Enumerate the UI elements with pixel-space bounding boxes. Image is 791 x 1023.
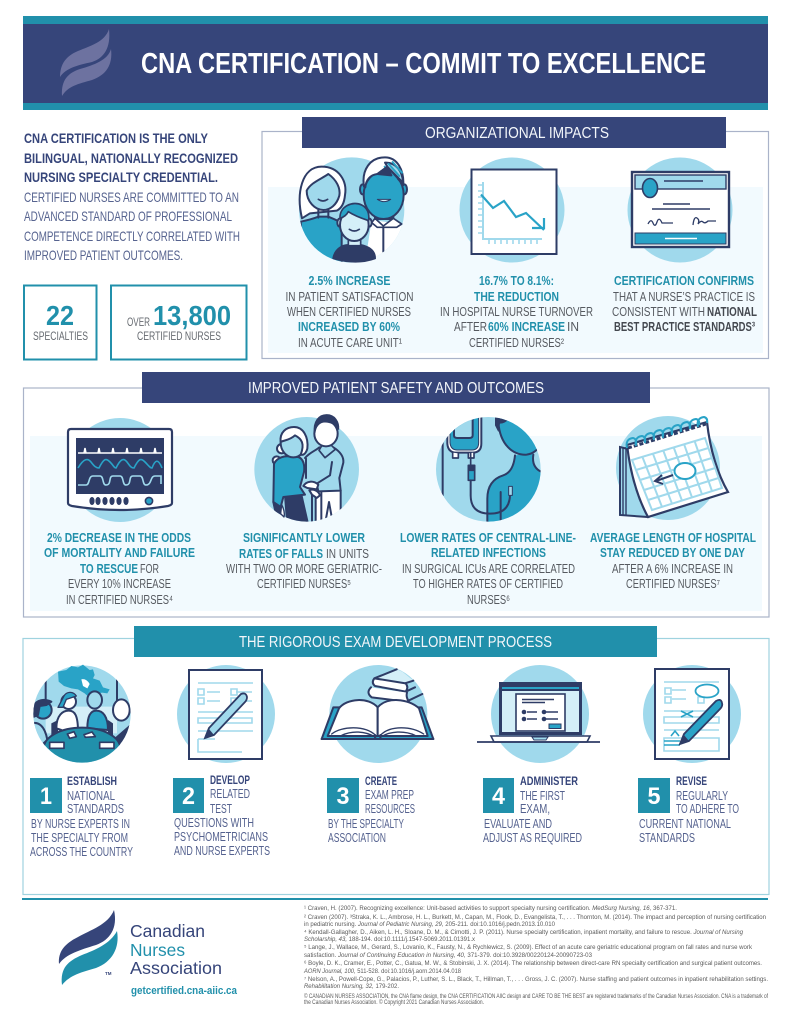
intro text block: CERTIFIED NURSES ARE COMMITTED TO AN bbox=[24, 189, 239, 205]
references: AORN Journal, 100, 511-528. doi:10.1016/j.aorn.2014.04.018 bbox=[303, 969, 462, 975]
panel: the rigorous exam development process bbox=[23, 626, 769, 894]
heading: organizational impacts bbox=[302, 117, 726, 148]
icon: laptop with exam bbox=[477, 665, 600, 763]
text: nurse turnover bbox=[440, 274, 593, 350]
step 4: ADJUST AS REQUIRED bbox=[483, 831, 582, 845]
step 4: EXAM, bbox=[520, 802, 550, 816]
step 3: RESOURCES bbox=[365, 802, 415, 816]
references: ⁴ Kendall-Gallagher, D., Aiken, L. H., Sloane, D. M., & Cimotti, J. P. (2011). Nurse specialty certification, inpatient mortality, and failure to rescue. Journal of Nursing bbox=[304, 929, 744, 936]
text: certification confirms: THAT A NURSE’S PRACTICE IS bbox=[613, 290, 755, 304]
step 2 bbox=[173, 775, 270, 858]
text: nurse turnover: 16.7% TO 8.1%: bbox=[479, 274, 554, 288]
text: nurse turnover: IN bbox=[567, 320, 579, 334]
text: length of stay: AFTER A 6% INCREASE IN bbox=[612, 562, 733, 576]
intro text block: COMPETENCE DIRECTLY CORRELATED WITH bbox=[24, 228, 240, 244]
references: ⁶ Boyle, D. K., Cramer, E., Potter, C., Gatua, M. W., & Stobinski, J. X. (2014). The relationship between direct-care RN specialty certification and surgical patient outcomes. bbox=[304, 960, 762, 967]
icon: vital signs monitor bbox=[68, 418, 172, 522]
step 5: REVISE bbox=[676, 776, 707, 788]
icon: open book and stack of books bbox=[322, 665, 433, 763]
text: falls: SIGNIFICANTLY LOWER bbox=[243, 531, 365, 545]
step 2: 2 bbox=[182, 783, 195, 810]
text: infections: IN SURGICAL ICUs ARE CORRELATED bbox=[402, 562, 575, 576]
step 2: DEVELOP bbox=[210, 775, 250, 787]
text: infections bbox=[400, 531, 576, 607]
text: patient satisfaction: INCREASED BY 60% bbox=[298, 320, 400, 334]
heading: exam process: THE RIGOROUS EXAM DEVELOPMENT PROCESS bbox=[239, 634, 552, 651]
step 1: STANDARDS bbox=[67, 802, 124, 816]
logo: Canadian Nurses Association: Nurses bbox=[130, 940, 185, 960]
text: certification confirms: CONSISTENT WITH bbox=[612, 305, 705, 319]
step 2: QUESTIONS WITH bbox=[174, 816, 254, 830]
text: falls: RATES OF FALLS bbox=[239, 547, 323, 561]
icon: team around a table with map bbox=[31, 665, 131, 769]
text: certification confirms: NATIONAL bbox=[707, 305, 757, 319]
step 1: BY NURSE EXPERTS IN bbox=[31, 817, 130, 831]
panel: organizational impacts bbox=[262, 117, 768, 358]
logo: Canadian Nurses Association bbox=[59, 910, 238, 997]
step 1: ACROSS THE COUNTRY bbox=[30, 845, 133, 859]
step 2: AND NURSE EXPERTS bbox=[174, 844, 270, 858]
text: mortality bbox=[44, 531, 195, 607]
text: nurse turnover: 60% INCREASE bbox=[488, 320, 565, 334]
text: falls: WITH TWO OR MORE GERIATRIC- bbox=[226, 562, 382, 576]
text: infections: RELATED INFECTIONS bbox=[431, 546, 546, 560]
step 5 bbox=[638, 776, 739, 845]
text: patient satisfaction bbox=[286, 274, 414, 350]
step 5: STANDARDS bbox=[639, 831, 695, 845]
text: certification confirms: CERTIFICATION CONFIRMS bbox=[614, 274, 754, 288]
text: mortality: FOR bbox=[140, 562, 159, 576]
step 2: RELATED bbox=[210, 787, 250, 801]
references: ⁵ Lange, J., Wallace, M., Gerard, S., Lovanio, K., Fausty, N., & Rychlewicz, S. (2009). Effect of an acute care geriatric educational program on fall rates and nurse work bbox=[304, 944, 753, 951]
references: the Canadian Nurses Association. © Copyright 2021 Canadian Nurses Association. bbox=[304, 999, 484, 1006]
intro text block: IMPROVED PATIENT OUTCOMES. bbox=[24, 247, 183, 263]
references: ¹ Craven, H. (2007). Recognizing excellence: Unit-based activities to support specialty nursing certification. MedSurg Nursing, 16, 367-371. bbox=[304, 906, 677, 912]
step 5: REGULARLY bbox=[676, 789, 728, 803]
text: certification confirms bbox=[612, 274, 757, 334]
icon: family bbox=[299, 157, 407, 263]
references: in pediatric nursing. Journal of Pediatric Nursing, 29, 205-211. doi:10.1016/j.pedn.2013.10.010 bbox=[304, 922, 556, 928]
text: patient satisfaction: IN ACUTE CARE UNIT¹ bbox=[298, 336, 402, 350]
text: infections: NURSES⁶ bbox=[467, 593, 510, 607]
step 3: EXAM PREP bbox=[365, 788, 414, 802]
step 3 bbox=[327, 776, 415, 845]
text: length of stay: AVERAGE LENGTH OF HOSPITAL bbox=[590, 531, 756, 545]
heading: improved patient safety: IMPROVED PATIENT SAFETY AND OUTCOMES bbox=[248, 380, 544, 397]
heading: exam process bbox=[134, 626, 657, 657]
text: length of stay: STAY REDUCED BY ONE DAY bbox=[600, 546, 746, 560]
icon: certificate bbox=[628, 158, 732, 262]
step 2: TEST bbox=[210, 802, 232, 816]
panel: improved patient safety and outcomes bbox=[24, 372, 769, 617]
intro text block: CNA CERTIFICATION IS THE ONLY bbox=[24, 130, 209, 146]
step 1 bbox=[30, 776, 133, 859]
text: patient satisfaction: IN PATIENT SATISFACTION bbox=[286, 290, 414, 304]
icon: revised form and pen bbox=[643, 665, 741, 763]
text: nurse turnover: IN HOSPITAL NURSE TURNOVER bbox=[440, 305, 593, 319]
references: ⁷ Nelson, A., Powell-Cope, G., Palacios, P., Luther, S. L., Black, T., Hillman, T., . . . Gross, J. C. (2007). Nurse staffing and patient outcomes in inpatient rehabilitation settings. bbox=[304, 976, 768, 983]
header banner bbox=[23, 16, 768, 110]
logo: Canadian Nurses Association: TM bbox=[105, 971, 112, 976]
icon: exam form and pen bbox=[177, 665, 275, 763]
icon: calendar bbox=[616, 416, 728, 520]
step 3: ASSOCIATION bbox=[328, 831, 386, 845]
stat box: 22 specialties: 22 bbox=[46, 300, 74, 331]
icon: header flame bbox=[60, 29, 111, 96]
step 1: THE SPECIALTY FROM bbox=[31, 831, 128, 845]
logo: Canadian Nurses Association: Canadian bbox=[130, 921, 205, 941]
intro text block: NURSING SPECIALTY CREDENTIAL. bbox=[24, 169, 218, 185]
footer rule bbox=[22, 898, 768, 900]
logo: Canadian Nurses Association: getcertified.cna-aiic.ca bbox=[131, 985, 238, 997]
stat box: 13,800 certified nurses: 13,800 bbox=[153, 300, 231, 331]
step 4: 4 bbox=[492, 783, 506, 810]
step 3: 3 bbox=[336, 783, 350, 810]
logo: Canadian Nurses Association: Association bbox=[130, 958, 222, 978]
stat box: 22 specialties bbox=[24, 286, 96, 360]
intro text block: BILINGUAL, NATIONALLY RECOGNIZED bbox=[24, 150, 238, 166]
text: patient satisfaction: 2.5% INCREASE bbox=[308, 274, 390, 288]
references: Scholarship, 43, 188-194. doi:10.1111/j.1547-5069.2011.01391.x bbox=[304, 937, 475, 943]
heading: organizational impacts: ORGANIZATIONAL IMPACTS bbox=[425, 125, 609, 142]
text: mortality: OF MORTALITY AND FAILURE bbox=[44, 546, 195, 560]
intro text block: ADVANCED STANDARD OF PROFESSIONAL bbox=[24, 208, 232, 224]
references: Rehabilitation Nursing, 32, 179-202. bbox=[304, 984, 399, 990]
step 4: ADMINISTER bbox=[520, 776, 579, 788]
stat box: 13,800 certified nurses bbox=[111, 286, 246, 360]
step 5: TO ADHERE TO bbox=[676, 802, 739, 816]
text: mortality: TO RESCUE bbox=[80, 562, 138, 576]
text: nurse turnover: CERTIFIED NURSES² bbox=[469, 336, 564, 350]
step 2: PSYCHOMETRICIANS bbox=[174, 830, 268, 844]
text: mortality: IN CERTIFIED NURSES⁴ bbox=[66, 593, 173, 607]
heading: improved patient safety bbox=[142, 372, 650, 403]
stat box: 13,800 certified nurses: OVER bbox=[127, 315, 150, 329]
step 3: CREATE bbox=[365, 776, 397, 788]
text: mortality: EVERY 10% INCREASE bbox=[68, 577, 171, 591]
text: falls bbox=[226, 531, 382, 591]
step 1: ESTABLISH bbox=[67, 776, 117, 788]
step 3: BY THE SPECIALTY bbox=[328, 817, 404, 831]
text: infections: TO HIGHER RATES OF CERTIFIED bbox=[413, 577, 563, 591]
references: satisfaction. Journal of Continuing Education in Nursing, 40, 371-379. doi:10.3928/00220124-20090723-03 bbox=[304, 953, 593, 959]
step 5: CURRENT NATIONAL bbox=[639, 817, 731, 831]
text: falls: IN UNITS bbox=[326, 547, 369, 561]
text: length of stay bbox=[590, 531, 756, 591]
icon: declining chart bbox=[460, 158, 564, 262]
step 1: NATIONAL bbox=[67, 789, 115, 803]
icon: nurse helping elderly patient bbox=[254, 415, 359, 525]
step 5: 5 bbox=[648, 783, 660, 810]
stat box: 22 specialties: SPECIALTIES bbox=[33, 329, 88, 343]
icon: IV drip and patient bbox=[436, 414, 543, 525]
text: length of stay: CERTIFIED NURSES⁷ bbox=[626, 577, 720, 591]
text: falls: CERTIFIED NURSES⁵ bbox=[257, 577, 351, 591]
step 4: EVALUATE AND bbox=[484, 817, 552, 831]
text: nurse turnover: THE REDUCTION bbox=[474, 290, 559, 304]
stat box: 13,800 certified nurses: CERTIFIED NURSES bbox=[137, 329, 221, 343]
intro text block bbox=[24, 130, 240, 263]
references bbox=[303, 906, 768, 1006]
step 4: THE FIRST bbox=[520, 789, 565, 803]
references: ² Craven (2007). ³Straka, K. L., Ambrose, H. L., Burkett, M., Capan, M., Flook, D., Evangelista, T., . . . Thornton, M. (2014). The impact and perception of nursing certification bbox=[304, 915, 766, 921]
text: patient satisfaction: WHEN CERTIFIED NURSES bbox=[287, 305, 411, 319]
step 4 bbox=[483, 776, 582, 845]
step 1: 1 bbox=[40, 783, 52, 810]
text: infections: LOWER RATES OF CENTRAL-LINE- bbox=[400, 531, 576, 545]
text: mortality: 2% DECREASE IN THE ODDS bbox=[47, 531, 191, 545]
text: nurse turnover: AFTER bbox=[454, 320, 487, 334]
